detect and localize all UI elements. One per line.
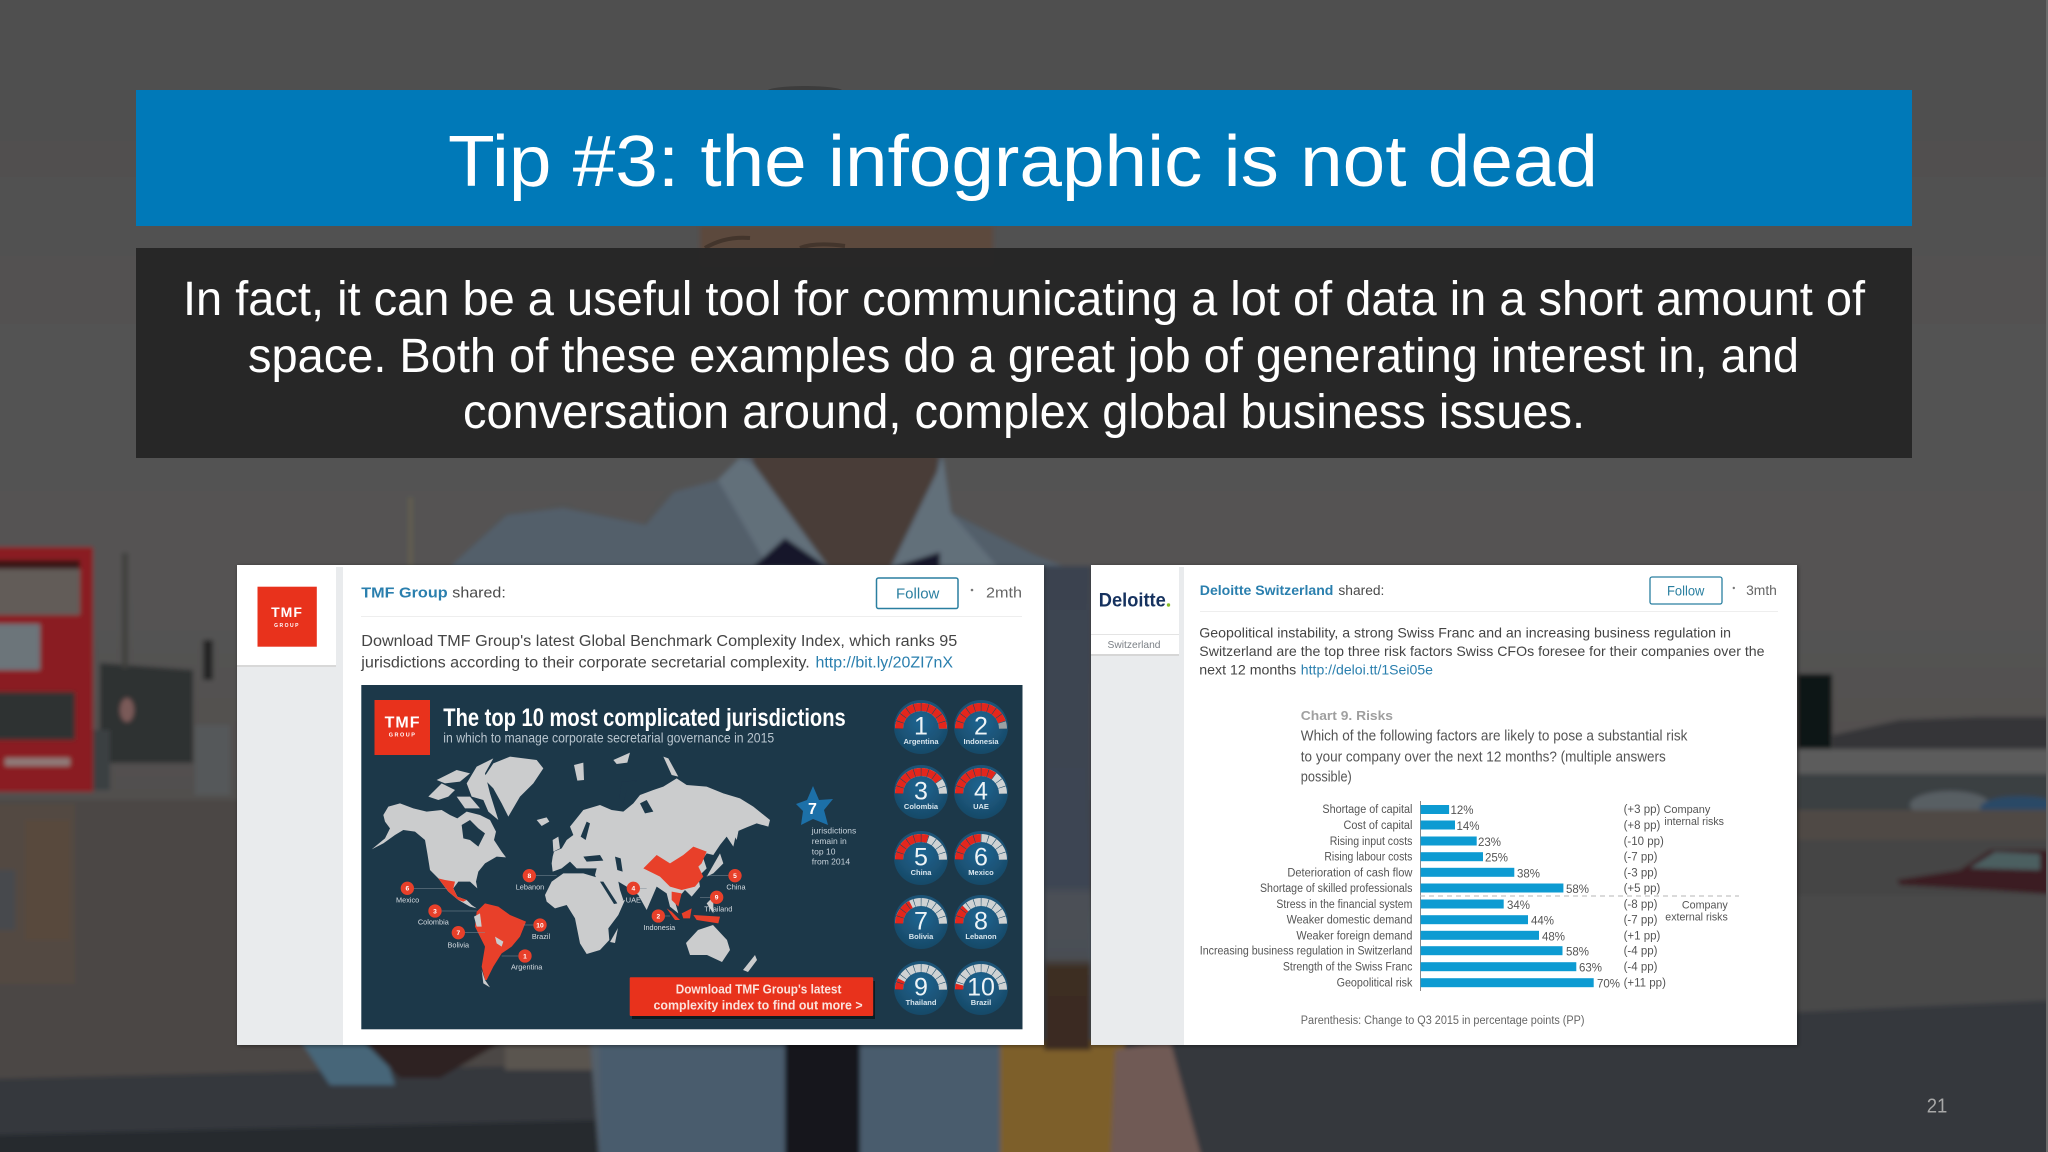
bar chart: risks: (+11 pp) [1624,978,1666,990]
bar chart: risks: (-7 pp) [1624,852,1658,864]
chart footnote: Parenthesis: Change to Q3 2015 in percentage points (PP) [1301,1015,1585,1027]
map markers: Colombia [418,918,450,927]
bar chart: risks: 44% [1531,916,1554,928]
dial 5 [894,831,948,885]
bar chart: risks: (-4 pp) [1624,946,1658,958]
bar chart: risks [1200,801,1739,991]
map markers [396,869,746,972]
bar chart: risks: Shortage of capital [1322,804,1412,816]
star callout: 7 jurisdictions: 7 [808,801,817,818]
icon: TMF logo: GROUP [274,623,300,629]
bar chart: risks: (-10 pp) [1624,836,1664,848]
dial 9: 9 [914,974,928,1002]
dial 9: Thailand [906,998,937,1007]
map: Australia, Madagascar and New Zealand [610,925,757,972]
title banner [136,90,1912,226]
bar chart: risks: 70% [1597,979,1620,991]
bar chart: risks: external risks [1665,912,1728,924]
bar chart: risks: 23% [1478,837,1501,849]
eyebrows between banners [705,238,845,248]
post header: shared: [1338,583,1384,598]
icon: Deloitte logo: Switzerland [1108,639,1161,651]
dial 1: 1 [914,712,928,740]
map markers: UAE [626,895,641,904]
chart heading: Chart 9. Risks [1301,708,1393,723]
dial 8: Lebanon [965,932,997,941]
bar chart: risks: Shortage of skilled professionals [1260,883,1413,895]
bar chart: risks: 58% [1566,947,1589,959]
bar chart: risks: Rising input costs [1330,836,1413,848]
infographic logo: TMF [385,715,421,732]
bar chart: risks: (+3 pp) [1624,804,1661,816]
icon: TMF logo [258,587,317,647]
post header: 3mth [1746,583,1777,598]
map markers: 9 [715,895,719,902]
post header [1200,577,1778,612]
map markers: 7 [456,930,460,937]
icon: Deloitte logo: Deloitte [1099,591,1166,612]
map markers: 10 [536,922,544,929]
dial 2: Indonesia [963,737,999,746]
bar chart: risks: Rising labour costs [1324,852,1413,864]
page number: 21 [1927,1096,1947,1118]
bar chart: risks: Weaker foreign demand [1296,930,1412,942]
dial 8: 8 [974,908,988,936]
bar chart: risks: Weaker domestic demand [1287,915,1412,927]
panel: TMF Group post [237,565,1044,1045]
intro text box: space. Both of these examples do a great job of generating interest in, and [248,330,1799,383]
bar chart: risks: 48% [1542,931,1565,943]
dial 1 [894,700,948,754]
panel: Deloitte Switzerland post [1091,565,1797,1045]
post text: http://deloi.tt/1Sei05e [1301,661,1433,677]
post text: Geopolitical instability, a strong Swiss Franc and an increasing business regulation in [1199,624,1731,640]
dial 5: 5 [914,844,928,872]
chart heading: to your company over the next 12 months? (multiple answers [1301,750,1666,766]
post text: Switzerland are the top three risk factors Swiss CFOs foresee for their companies over the [1199,643,1765,659]
post header: TMF Group [361,584,448,601]
dial 3 [894,765,948,819]
post header: Follow [1667,584,1705,599]
infographic heading: The top 10 most complicated jurisdictions [443,704,846,732]
star callout: 7 jurisdictions [796,786,856,866]
bar chart: risks: 25% [1485,853,1508,865]
chart heading: Which of the following factors are likely to pose a substantial risk [1301,729,1688,745]
dial 7: Bolivia [909,932,934,941]
bar chart: risks: (-7 pp) [1624,915,1658,927]
bar chart: risks: (+8 pp) [1624,820,1661,832]
bar chart: risks: (+1 pp) [1624,930,1661,942]
bar chart: risks: Company [1664,804,1711,816]
dial 1: Argentina [903,737,939,746]
chart heading: possible) [1301,770,1352,786]
world map [372,753,770,987]
bar chart: risks: (-4 pp) [1624,962,1658,974]
post header: 2mth [986,584,1022,601]
ranking dials [894,700,1008,1015]
bar chart: risks: Cost of capital [1344,820,1412,832]
intro text box: conversation around, complex global business issues. [463,386,1585,439]
bar chart: risks: Geopolitical risk [1337,978,1413,990]
dial 9 [894,961,948,1015]
star callout: 7 jurisdictions: top 10 [812,846,836,856]
post text: Download TMF Group's latest Global Benchmark Complexity Index, which ranks 95 [361,633,957,650]
dial 8 [954,895,1008,949]
post text: jurisdictions according to their corporate secretarial complexity. [360,654,810,671]
dial 2 [954,700,1008,754]
right edge sliver [2046,0,2048,1152]
dial 4: UAE [973,802,989,811]
bar chart: risks: (+5 pp) [1624,883,1661,895]
dial 7: 7 [914,908,928,936]
map markers: Mexico [396,895,419,904]
dial 6: 6 [974,844,988,872]
infographic heading [443,704,846,746]
dial 4: 4 [974,778,988,806]
title banner: Tip #3: the infographic is not dead [448,122,1598,202]
map markers: 1 [523,953,527,960]
infographic logo: GROUP [389,733,416,739]
bar chart: risks: Strength of the Swiss Franc [1283,962,1413,974]
intro text box [136,248,1912,458]
map markers: Argentina [511,963,543,972]
bar chart: risks: 38% [1517,868,1540,880]
dial 6: Mexico [968,868,994,877]
post header: Deloitte Switzerland [1200,583,1333,598]
infographic heading: in which to manage corporate secretarial governance in 2015 [443,730,774,746]
icon: TMF logo: TMF [271,604,303,620]
intro text box: In fact, it can be a useful tool for communicating a lot of data in a short amount of [183,273,1866,326]
bar chart: risks: (-3 pp) [1624,867,1658,879]
download call to action [630,977,875,1019]
infographic: top 10 jurisdictions [361,685,1022,1029]
icon: Deloitte logo [1099,591,1170,651]
map markers: 8 [527,873,531,880]
hair above banner [767,86,843,96]
bar chart: risks: internal risks [1664,816,1724,828]
dial 7 [894,895,948,949]
bar chart: risks: 34% [1507,900,1530,912]
map markers: 5 [733,873,737,880]
download call to action: Download TMF Group's latest [676,981,842,996]
map markers: 4 [631,886,635,893]
map markers: Bolivia [448,941,470,950]
post header: Follow [896,585,940,602]
dial 2: 2 [974,712,988,740]
star callout: 7 jurisdictions: from 2014 [812,856,850,866]
post text: http://bit.ly/20ZI7nX [816,654,954,671]
post header [361,578,1022,617]
post text [1199,624,1765,677]
bar chart: risks: 63% [1579,963,1602,975]
bar chart: risks: Increasing business regulation in Switzerland [1200,946,1412,958]
map markers: China [726,882,746,891]
map markers: Thailand [704,904,732,913]
dial 3: Colombia [904,802,939,811]
post text: next 12 months [1199,661,1296,677]
bar chart: risks: Company [1682,899,1728,911]
chart heading [1301,708,1688,786]
bar chart: risks: Deterioration of cash flow [1287,867,1413,879]
star callout: 7 jurisdictions: jurisdictions [811,825,856,835]
map markers: 6 [405,886,409,893]
map markers: 2 [656,913,660,920]
bar chart: risks: 58% [1566,884,1589,896]
dial 3: 3 [914,778,928,806]
download call to action: complexity index to find out more > [654,997,863,1012]
bar chart: risks: (-8 pp) [1624,899,1658,911]
dial 10: Brazil [971,998,991,1007]
infographic logo [374,700,430,755]
map markers: Brazil [532,932,551,941]
dial 5: China [911,868,932,877]
dial 6 [954,831,1008,885]
bar chart: risks: 14% [1456,821,1480,833]
dial 4 [954,765,1008,819]
dial 10: 10 [967,974,995,1002]
post header: shared: [452,584,506,601]
bar chart: risks: Stress in the financial system [1276,899,1412,911]
star callout: 7 jurisdictions: remain in [812,836,847,846]
bar chart: risks: 12% [1450,805,1474,817]
map markers: Lebanon [516,882,544,891]
post text [360,633,957,671]
map markers: Indonesia [643,923,676,932]
dial 10 [954,961,1008,1015]
map markers: 3 [433,908,437,915]
